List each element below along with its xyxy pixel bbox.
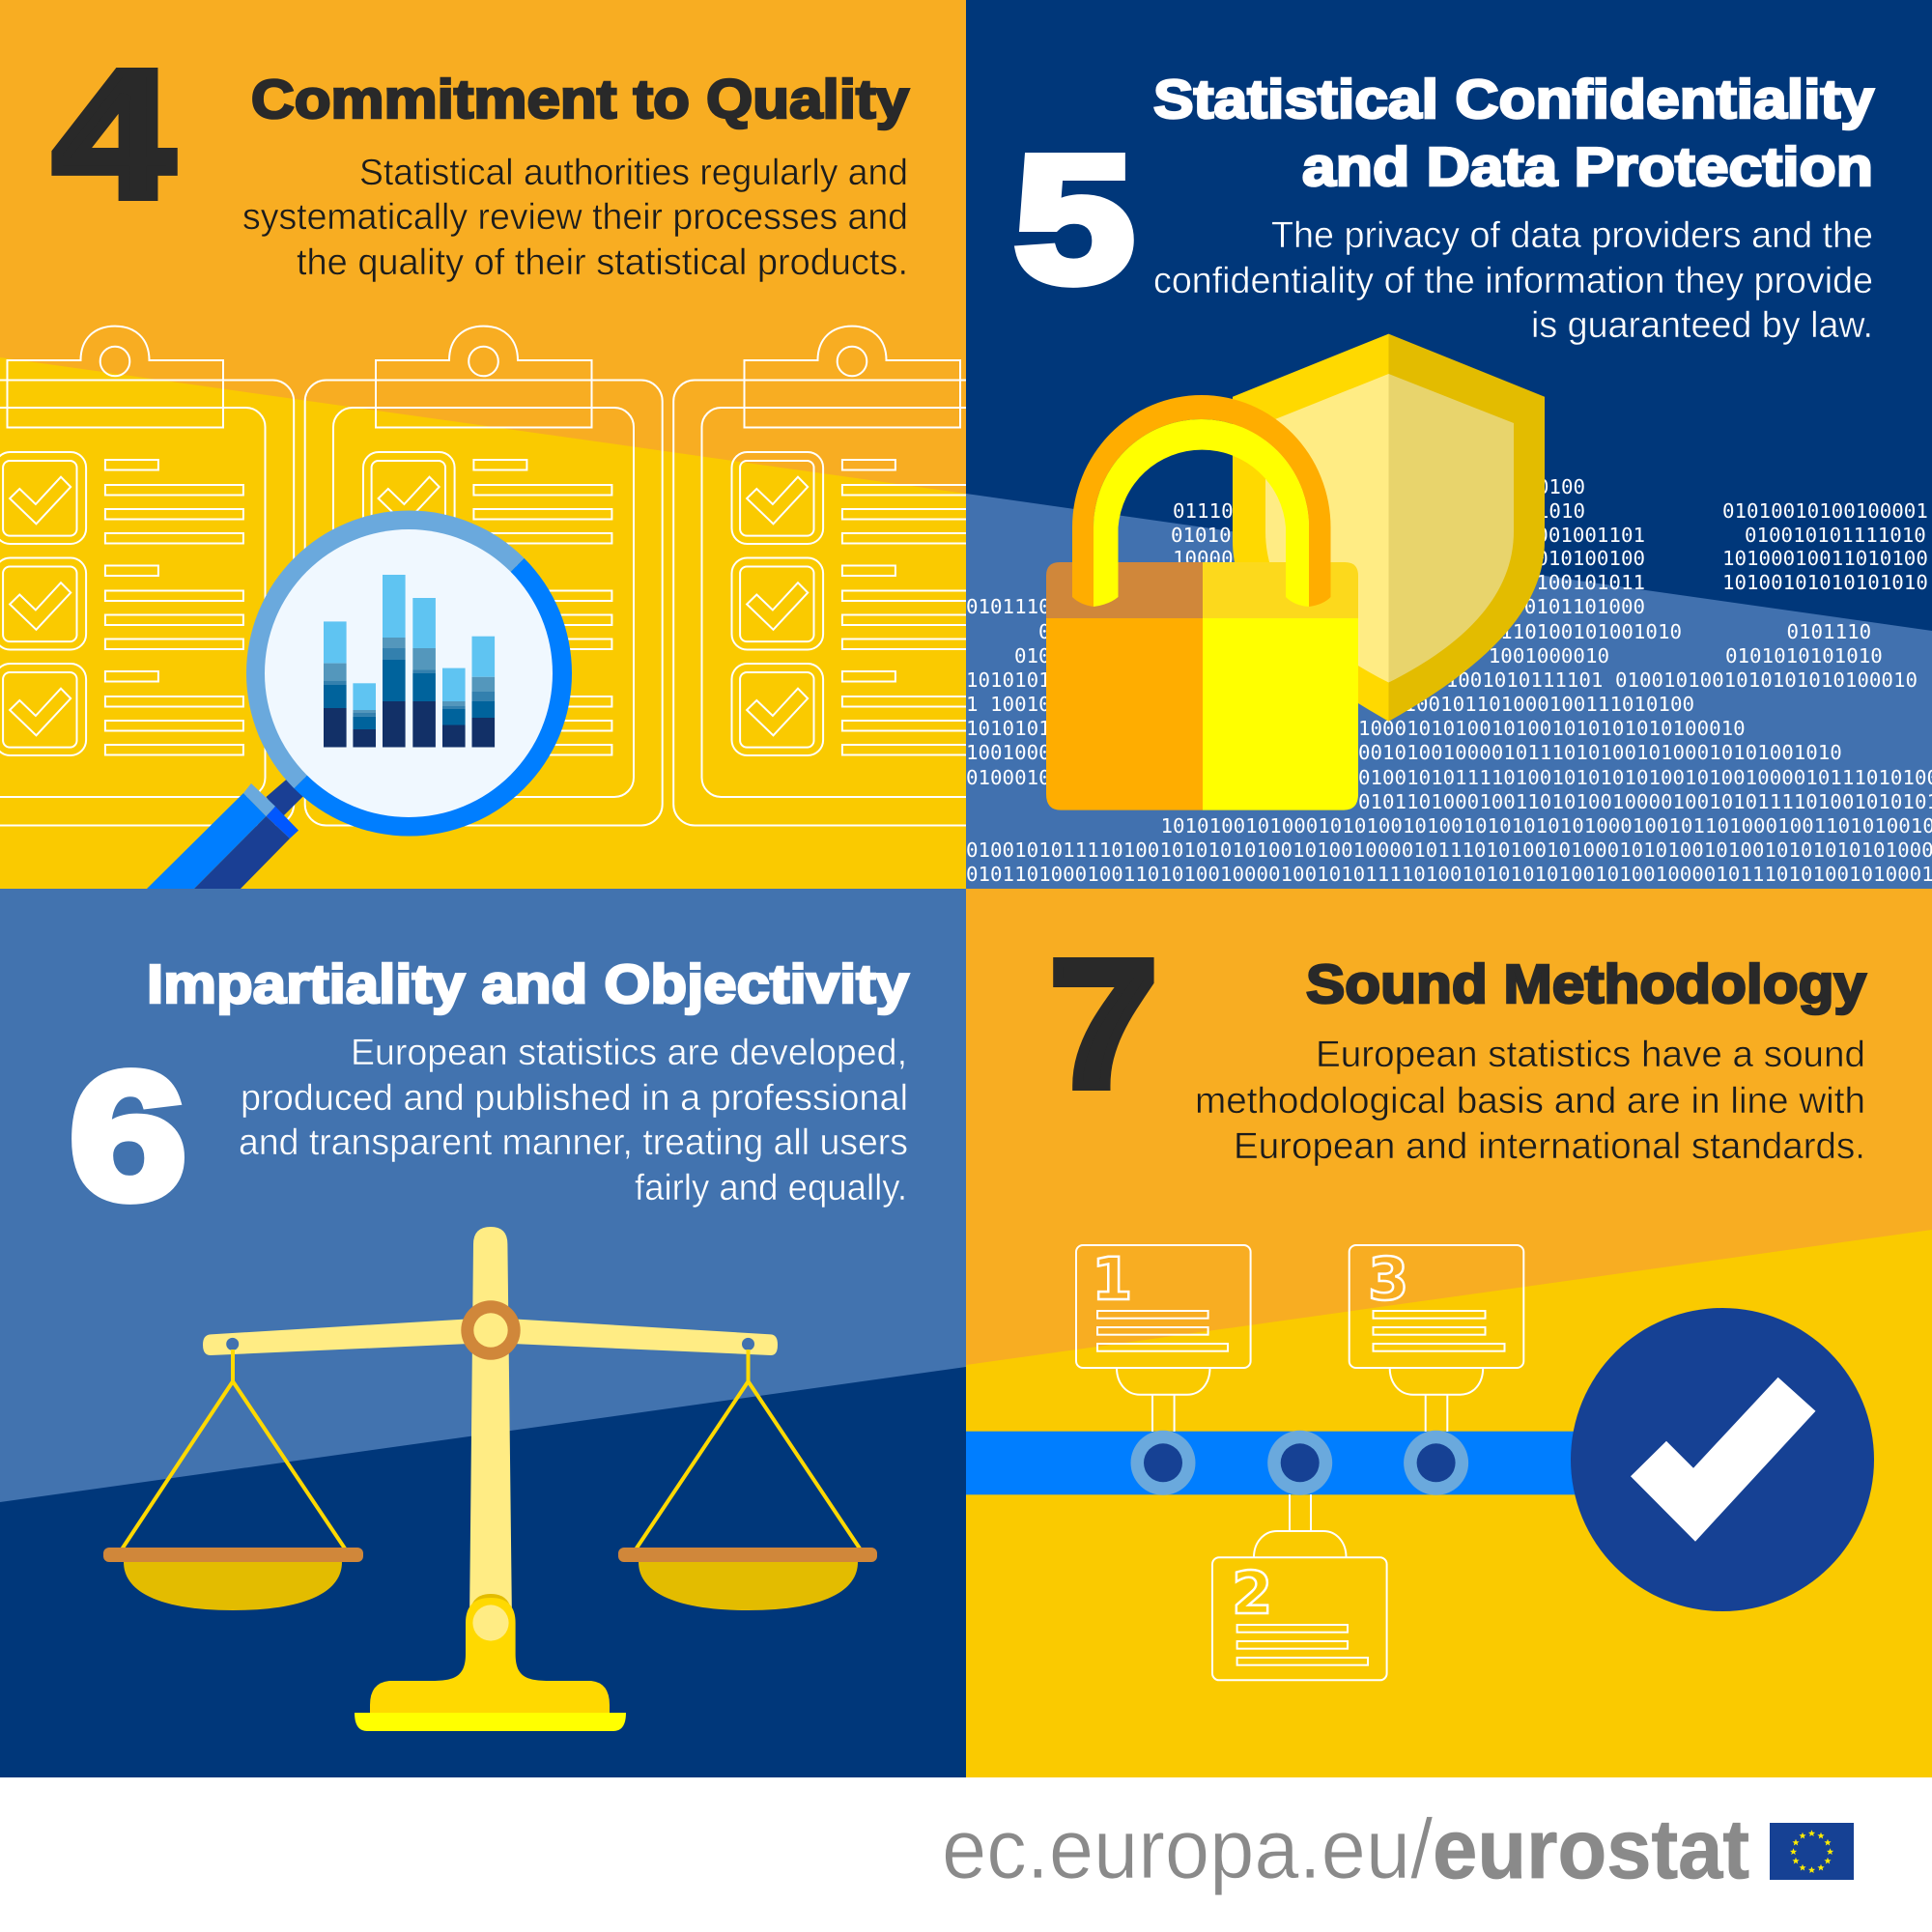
heading: Sound Methodology — [1306, 953, 1866, 1015]
body text — [239, 1033, 908, 1208]
body text: fairly and equally. — [635, 1168, 907, 1208]
binary code background: 01011010001001101010010000100101011110100101010101001010010000101110101001010001 — [966, 863, 1932, 886]
icon: padlock — [1046, 395, 1358, 810]
footer — [942, 1803, 1854, 1896]
binary code background: 10001010100101001010101010100010 — [1358, 717, 1746, 740]
binary code background: 0101110 — [966, 595, 1051, 618]
binary code background: 1010101 — [966, 668, 1051, 692]
left pan — [103, 1350, 363, 1610]
body text — [1195, 1035, 1865, 1167]
binary code background: 100101101000100111010100 — [1405, 693, 1694, 716]
icon: clipboard right — [672, 325, 966, 827]
binary code background: 01010010100100001 — [1722, 499, 1928, 523]
card 3: 3 — [1368, 1245, 1408, 1314]
binary code background: 10100010011010100 — [1722, 547, 1928, 570]
binary code background: 1001000 — [966, 741, 1051, 764]
body text: and transparent manner, treating all users — [239, 1122, 908, 1163]
body text: European statistics are developed, — [351, 1033, 907, 1073]
body text: European statistics have a sound — [1316, 1035, 1865, 1075]
body text: confidentiality of the information they provide — [1153, 261, 1873, 301]
number 5: 5 — [1014, 120, 1134, 320]
binary code background: 101010 — [1513, 499, 1585, 523]
binary code background: 0010100100001011101010010100010101001010 — [1358, 741, 1842, 764]
card 3 — [1350, 1245, 1523, 1432]
binary code background: 0101110 — [1787, 620, 1871, 643]
right pan — [618, 1350, 877, 1610]
icon: clipboard left — [0, 327, 294, 826]
node 2 — [1267, 1431, 1332, 1495]
body text: European and international standards. — [1234, 1126, 1865, 1167]
binary code background: 0100010 — [966, 766, 1051, 789]
binary code background: 1 10010 — [966, 693, 1051, 716]
heading: and Data Protection — [1302, 136, 1873, 198]
binary code background: 00101101000 — [1512, 595, 1645, 618]
binary code background: 0100101011 — [1524, 571, 1645, 594]
heading: Statistical Confidentiality — [1153, 69, 1874, 130]
body text: produced and published in a professional — [241, 1078, 908, 1119]
card 1 — [1076, 1245, 1251, 1432]
panel: 7 sound methodology — [966, 889, 1932, 1777]
node 1 — [1130, 1431, 1196, 1495]
binary code background: 1001000010 — [1489, 644, 1609, 668]
number 6: 6 — [70, 1037, 186, 1236]
blue process bar — [966, 1432, 1594, 1494]
binary code background: 010010101111010 — [1745, 524, 1926, 547]
body text: Statistical authorities regularly and — [359, 153, 908, 193]
icon: magnifying glass with bar chart — [147, 510, 572, 889]
body text — [1153, 215, 1873, 346]
icon: clipboard centre — [305, 327, 663, 826]
icon: shield — [1233, 334, 1545, 722]
binary code background: 010 — [1014, 644, 1051, 668]
panel: 4 commitment to quality — [0, 0, 1031, 889]
number 4: 4 — [54, 35, 173, 235]
body text — [242, 153, 908, 283]
body text: methodological basis and are in line with — [1195, 1081, 1865, 1122]
base — [355, 1594, 626, 1731]
binary code background — [966, 475, 1932, 886]
card 1: 1 — [1092, 1245, 1132, 1314]
binary code background: 1010101 — [966, 717, 1051, 740]
panel: 6 impartiality and objectivity — [0, 889, 966, 1777]
node 3 — [1404, 1431, 1468, 1495]
heading: Impartiality and Objectivity — [147, 953, 909, 1015]
body text: systematically review their processes and — [242, 197, 908, 238]
binary code background: 10100101010101010 — [1722, 571, 1928, 594]
binary code background: 1001010111101 0100101001010101010100010 — [1446, 668, 1918, 692]
icon: balance scale — [103, 1227, 877, 1731]
card 2: 2 — [1232, 1559, 1272, 1628]
binary code background: 01010 — [1171, 524, 1232, 547]
heading — [1153, 77, 1876, 187]
binary code background: 0110100101001010 — [1489, 620, 1682, 643]
website address: ec.europa.eu/eurostat — [942, 1803, 1749, 1896]
body text: is guaranteed by law. — [1531, 305, 1873, 346]
icon: check mark badge — [1571, 1308, 1874, 1611]
card 2 — [1212, 1494, 1387, 1680]
body text: the quality of their statistical products. — [297, 242, 908, 283]
binary code background: 0101010101010 — [1725, 644, 1883, 668]
body text: The privacy of data providers and the — [1271, 215, 1873, 256]
panel: 5 statistical confidentiality — [966, 0, 1932, 889]
bar chart — [324, 575, 495, 748]
binary code background: 1001001101 — [1524, 524, 1645, 547]
heading: Commitment to Quality — [251, 69, 909, 130]
binary code background: 1010100100 — [1524, 547, 1645, 570]
binary code background: 01110 — [1173, 499, 1234, 523]
binary code background: 10000 — [1173, 547, 1234, 570]
binary code background: 0 — [1038, 620, 1051, 643]
icon: EU flag — [1770, 1823, 1854, 1880]
number 7: 7 — [1050, 924, 1157, 1124]
binary code background: 010100 — [1513, 475, 1585, 498]
